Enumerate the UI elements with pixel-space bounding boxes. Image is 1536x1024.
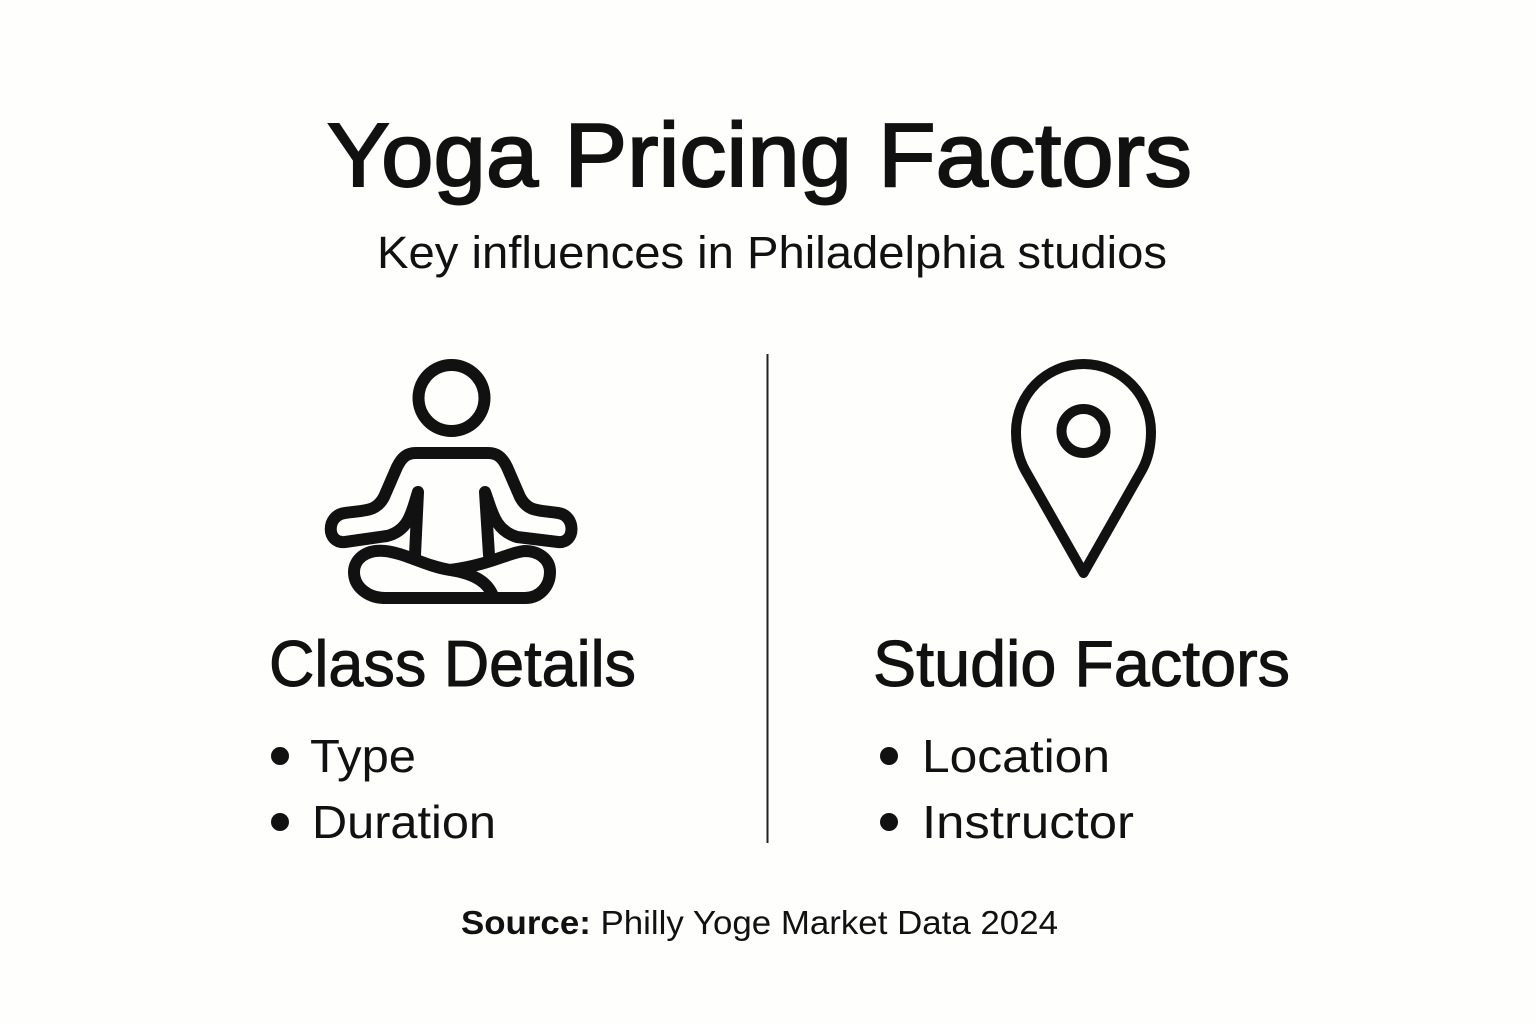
- panel: class details: [269, 365, 636, 848]
- heading: class details: Class Details: [269, 627, 636, 700]
- icon: meditating figure: [331, 365, 572, 598]
- bullet list: studio factors: [880, 730, 1134, 848]
- title: Yoga Pricing Factors: [327, 106, 1192, 206]
- bullet list: class details: Duration: [312, 796, 496, 848]
- source note: Source: Philly Yoge Market Data 2024: [461, 904, 1058, 941]
- bullet list: studio factors: Location: [922, 730, 1110, 782]
- heading: studio factors: Studio Factors: [873, 627, 1290, 700]
- bullet list: studio factors: Instructor: [922, 796, 1134, 848]
- icon: location pin: [1016, 364, 1151, 573]
- panel: studio factors: [873, 364, 1290, 848]
- bullet list: class details: [271, 730, 496, 848]
- subtitle: Key influences in Philadelphia studios: [377, 227, 1167, 278]
- bullet list: class details: Type: [310, 730, 416, 782]
